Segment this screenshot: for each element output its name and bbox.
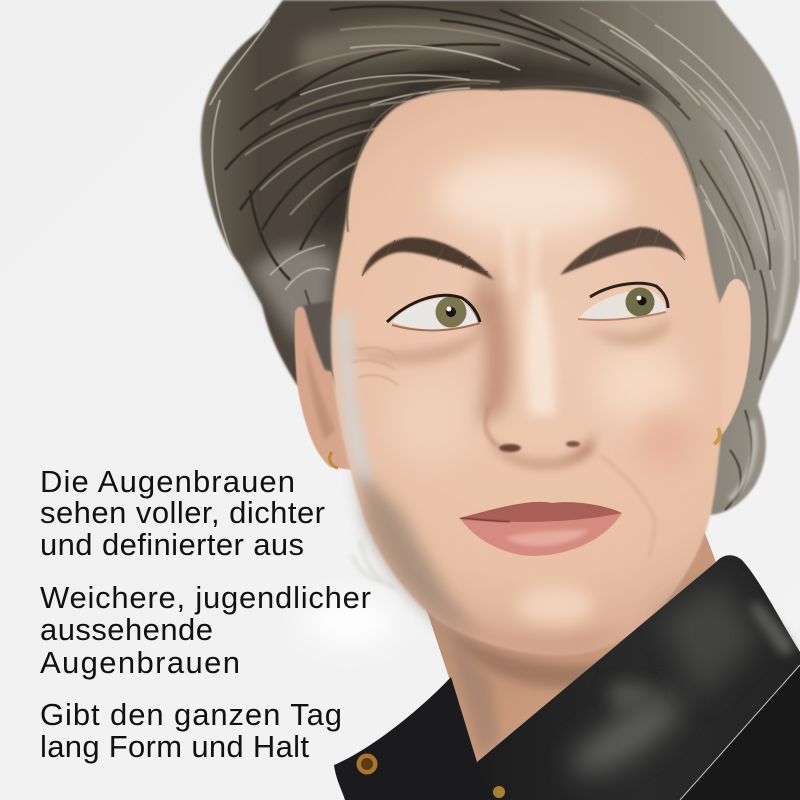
right collar xyxy=(477,555,800,800)
left ear inner shading xyxy=(305,345,335,440)
benefit 3 xyxy=(40,697,342,764)
benefit 2: Weichere, jugendlicher xyxy=(40,580,371,615)
benefit 1: Die Augenbrauen xyxy=(40,464,295,499)
collar edge line xyxy=(680,665,800,800)
nose wing left xyxy=(485,405,498,446)
hair xyxy=(201,0,800,515)
jaw gray shadow xyxy=(358,470,480,640)
jacket xyxy=(334,555,800,800)
eyebrow right xyxy=(560,227,686,275)
right ear xyxy=(700,279,751,442)
gold button xyxy=(356,754,378,774)
eyebrow left xyxy=(362,237,494,280)
bridge shadow xyxy=(470,270,500,320)
benefit 1: sehen voller, dichter xyxy=(40,495,325,530)
cheek highlight right xyxy=(595,345,685,425)
benefit 1 xyxy=(40,464,325,562)
jacket lower panel xyxy=(680,665,800,800)
eye socket shading xyxy=(345,318,672,364)
neck xyxy=(425,520,716,762)
benefit 1: und definierter aus xyxy=(40,527,304,562)
left collar xyxy=(334,677,500,800)
chin highlight xyxy=(517,585,593,625)
temple gray strip xyxy=(336,310,372,490)
cheek highlight left xyxy=(388,375,472,465)
soft glow behind text xyxy=(305,600,395,644)
hair over left ear xyxy=(304,300,336,372)
cheek blush right xyxy=(639,412,691,468)
neck side tendon xyxy=(450,640,500,755)
gold button lower xyxy=(493,786,505,798)
neck shadow xyxy=(445,585,700,688)
benefit 2 xyxy=(40,580,371,680)
portrait photo xyxy=(201,0,800,800)
forehead vertical creases xyxy=(508,225,535,290)
benefit 3: lang Form und Halt xyxy=(40,729,309,764)
text block: benefits xyxy=(40,464,371,764)
nose xyxy=(472,285,594,467)
forehead highlight xyxy=(435,153,625,237)
nostril left xyxy=(499,444,521,452)
hair wisps lower left xyxy=(352,540,395,588)
chin shading xyxy=(440,600,640,654)
benefit 2: Augenbrauen xyxy=(40,645,240,680)
nasolabial crease xyxy=(600,455,655,558)
earring left xyxy=(330,452,338,468)
leather highlights xyxy=(570,690,680,775)
left ear xyxy=(295,307,353,470)
eye left xyxy=(387,295,480,330)
nose underside shadow xyxy=(490,432,594,467)
earring right xyxy=(714,428,720,444)
lips xyxy=(460,502,622,556)
benefit 3: Gibt den ganzen Tag xyxy=(40,697,342,732)
crow's feet wrinkles xyxy=(352,348,398,385)
hair strands over hairline xyxy=(347,83,697,232)
face xyxy=(331,89,724,655)
nostril right xyxy=(566,441,580,447)
eye right xyxy=(578,283,668,320)
benefit 2: aussehende xyxy=(40,612,213,647)
